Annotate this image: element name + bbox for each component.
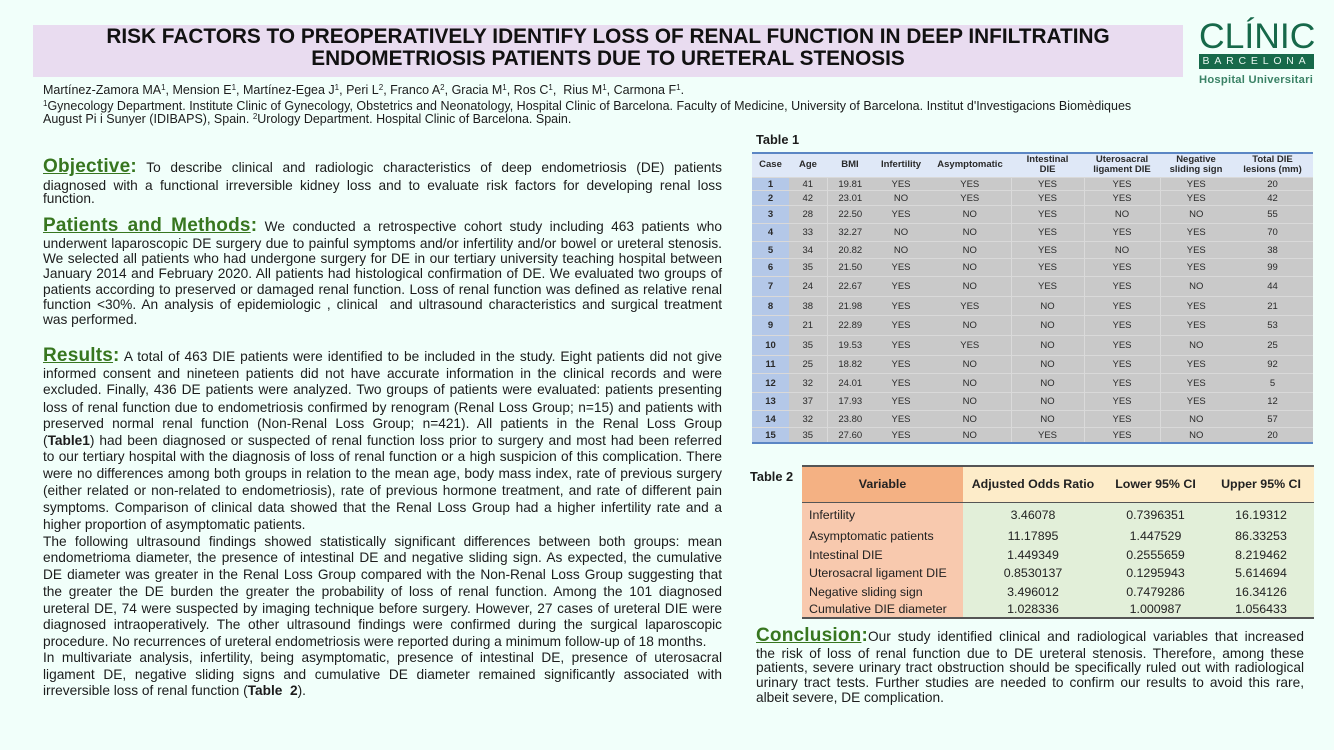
table 1: case data: 15	[765, 430, 776, 441]
table 1: case data: Negative	[1176, 154, 1216, 165]
table 1: case data: NO	[894, 245, 908, 256]
authors: Martínez-Zamora MA1, Mension E1, Martínez-Egea J1, Peri L2, Franco A2, Gracia M1, Ros C1, Rius M1, Carmona F1.	[43, 83, 684, 97]
table 1: case data: NO	[1189, 281, 1203, 292]
table 1: case data: NO	[963, 209, 977, 220]
panel: patients and methods: function <30%. An analysis of epidemiologic , clinical and ultrasound characteristics and surgical treatment	[43, 297, 722, 312]
table 2: multivariate odds ratios: 0.1295943	[1126, 566, 1185, 580]
table 1: case data: YES	[891, 301, 910, 312]
table 1: case data: NO	[1189, 430, 1203, 441]
table 1: case data: YES	[891, 209, 910, 220]
table 1: case data: YES	[1112, 320, 1132, 331]
logo: Clinic Barcelona	[1199, 16, 1315, 86]
table 1: case data: Uterosacral	[1096, 154, 1148, 165]
table 2: multivariate odds ratios: 0.7479286	[1126, 584, 1185, 598]
table 1: case data: 53	[1267, 320, 1278, 331]
title banner: ENDOMETRIOSIS PATIENTS DUE TO URETERAL STENOSIS	[311, 47, 905, 70]
table 2: multivariate odds ratios: Adjusted Odds Ratio	[972, 477, 1094, 491]
table 1: case data: 9	[768, 320, 773, 331]
table 1: case data: YES	[891, 262, 910, 273]
table 1: case data: YES	[891, 396, 910, 407]
table 1: case data: YES	[891, 340, 910, 351]
table 1: case data: 5	[768, 245, 773, 256]
table 2: multivariate odds ratios: 1.000987	[1130, 602, 1181, 616]
panel: patients and methods: underwent laparoscopic DE surgery due to painful symptoms and/or infertility and/or bowel or ureteral stenosis.	[43, 236, 722, 251]
table 1: case data: 42	[1267, 193, 1278, 204]
title banner: RISK FACTORS TO PREOPERATIVELY IDENTIFY LOSS OF RENAL FUNCTION IN DEEP INFILTRATING	[106, 25, 1110, 48]
table 2: multivariate odds ratios: 0.2555659	[1126, 548, 1185, 562]
table 1: case data: 20	[1267, 430, 1278, 441]
table 2: multivariate odds ratios: 1.449349	[1007, 548, 1059, 562]
table 1: case data: Case	[759, 159, 782, 170]
table 1: case data: 22.89	[838, 320, 862, 331]
panel: conclusion: the risk of loss of renal function due to DE ureteral stenosis. Therefore, among these	[756, 646, 1304, 661]
table 2: multivariate odds ratios: Cumulative DIE diameter	[809, 602, 947, 616]
table 1: case data: NO	[1115, 245, 1129, 256]
table 1: case data: 32	[802, 414, 813, 425]
table 1: case data: 35	[802, 430, 813, 441]
table 1: case data: YES	[1187, 378, 1206, 389]
table 1: case data: NO	[963, 320, 977, 331]
panel: results: the greater the DE burden the greater the probability of loss of renal function. Among the 101 diagnosed	[43, 584, 722, 599]
table 2: multivariate odds ratios: 86.33253	[1235, 529, 1287, 543]
panel: results: Results: A total of 463 DIE patients were identified to be included in the study. Eight patients did not give	[43, 345, 722, 366]
table 1: case data: 21.98	[838, 301, 862, 312]
table 1: case data: 10	[765, 340, 776, 351]
table 2: multivariate odds ratios: 8.219462	[1235, 548, 1287, 562]
panel: results: (either related or non-related to endometriosis), rate of previous hormone treatment, and rate of different pain	[43, 483, 722, 498]
table 1: case data: NO	[1040, 396, 1055, 407]
table 1: case data: 99	[1267, 262, 1278, 273]
table 1: case data: NO	[963, 378, 977, 389]
table 2: multivariate odds ratios: Infertility	[809, 508, 855, 522]
panel: results: symptoms. Comparison of clinical data showed that the Renal Loss Group had a higher infertility rate and a	[43, 500, 722, 515]
panel: results: The following ultrasound findings showed statistically significant differences between both groups: mean	[43, 534, 722, 549]
table 1: case data: 11	[765, 359, 776, 370]
table 1: case data: 13	[765, 396, 776, 407]
table 2: multivariate odds ratios: 0.7396351	[1126, 508, 1185, 522]
table 1: case data: Intestinal	[1027, 154, 1068, 165]
table 1: case data: YES	[891, 359, 910, 370]
table 1: case data: YES	[1112, 262, 1132, 273]
table 1: case data: 25	[802, 359, 813, 370]
table 1: case data: YES	[960, 340, 979, 351]
table 1: case data: YES	[1112, 414, 1132, 425]
table 1: case data: 7	[768, 281, 773, 292]
panel: results: preserved normal renal function (Non-Renal Loss Group; n=421). All patients in the Renal Loss Group	[43, 416, 722, 431]
table 1: case data: 55	[1267, 209, 1278, 220]
table 1: case data: 28	[802, 209, 813, 220]
panel: patients and methods: was performed.	[43, 312, 137, 327]
table 1: case data: NO	[1189, 340, 1203, 351]
table 1: case data: 57	[1267, 414, 1278, 425]
table 1: case data: YES	[960, 301, 979, 312]
table 2: multivariate odds ratios: Intestinal DIE	[809, 548, 883, 562]
panel: objective	[43, 156, 722, 206]
table 2: multivariate odds ratios: 1.447529	[1130, 529, 1181, 543]
panel: results: irreversible loss of renal function (Table 2).	[43, 683, 306, 698]
table 1: case data: 42	[802, 193, 813, 204]
table 2: multivariate odds ratios: Lower 95% CI	[1115, 477, 1196, 491]
table 1: case data: YES	[1187, 396, 1206, 407]
table 1: case data: YES	[1112, 227, 1132, 238]
table 2: multivariate odds ratios: Asymptomatic patients	[809, 529, 934, 543]
table 1: case data: sliding sign	[1170, 164, 1222, 175]
table 1: case data: YES	[1187, 359, 1206, 370]
table 1: case data: 19.53	[838, 340, 862, 351]
table 2: multivariate odds ratios: 1.028336	[1007, 602, 1059, 616]
panel: patients and methods: Patients and Methods: We conducted a retrospective cohort study including 463 patients who	[43, 215, 722, 236]
panel: conclusion: patients, severe urinary tract obstruction should be specifically ruled out with radiological	[756, 660, 1304, 675]
table 1: case data: NO	[963, 227, 977, 238]
table 1: case data: 33	[802, 227, 813, 238]
table 1: case data: YES	[1112, 378, 1132, 389]
table 1: case data: 38	[802, 301, 813, 312]
table 1: case data: 92	[1267, 359, 1278, 370]
table 1: case data: YES	[1038, 193, 1057, 204]
table 1: case data: YES	[1187, 245, 1206, 256]
table 1: case data: YES	[1038, 430, 1057, 441]
table 1: case data: 24	[802, 281, 813, 292]
panel: patients and methods: January 2014 and February 2020. All patients had histological confirmation of DE. We evaluated two groups of	[43, 266, 722, 281]
table 1: case data: 8	[768, 301, 773, 312]
table 1: case data: 5	[1270, 378, 1275, 389]
table 1: case data: YES	[1187, 178, 1206, 190]
table 1: case data: NO	[1189, 209, 1203, 220]
table 1: case data: YES	[1038, 281, 1057, 292]
table 1: case data: NO	[1040, 378, 1055, 389]
table 1: case data: NO	[963, 359, 977, 370]
table 1: case data: 27.60	[838, 430, 862, 441]
table 1: case data: NO	[1040, 359, 1055, 370]
table 1: case data: YES	[891, 178, 910, 190]
table 2: multivariate odds ratios: 0.8530137	[1004, 566, 1062, 580]
table 1: case data: Total DIE	[1252, 154, 1293, 165]
table 1: case data: YES	[1038, 262, 1057, 273]
table 2: multivariate odds ratios: Variable	[859, 477, 906, 491]
table 1: case data: 22.67	[838, 281, 862, 292]
table 2: multivariate odds ratios: 5.614694	[1235, 566, 1287, 580]
table 1: case data: DIE	[1040, 164, 1055, 175]
table 1: case data: 14	[765, 414, 776, 425]
table 1: case data: YES	[1112, 396, 1132, 407]
table 1: case data: YES	[1112, 281, 1132, 292]
panel: results	[43, 345, 722, 698]
table 1: case data: YES	[960, 178, 979, 190]
table 1: case data: 17.93	[838, 396, 862, 407]
table 2: multivariate odds ratios: Uterosacral ligament DIE	[809, 566, 947, 580]
table 1: case data: YES	[1112, 193, 1132, 204]
table 1: case data: NO	[963, 245, 977, 256]
table 1: case data: 18.82	[838, 359, 862, 370]
table 1: case data: 21	[802, 320, 813, 331]
table 1: case data: 37	[802, 396, 813, 407]
table 1: case data: 38	[1267, 245, 1278, 256]
table 1: case data: YES	[1187, 227, 1206, 238]
table 1: case data: YES	[1112, 178, 1132, 190]
panel: conclusion	[756, 625, 1304, 705]
table 1: case data: 19.81	[838, 178, 862, 190]
affiliations	[43, 99, 1131, 126]
table 1: case data: 35	[802, 340, 813, 351]
logo: Clinic Barcelona: Hospital Universitari	[1199, 74, 1313, 86]
affiliations: 1Gynecology Department. Institute Clinic of Gynecology, Obstetrics and Neonatology, Hospital Clinic of Barcelona. Faculty of Medicine, University of Barcelona. Institut d'Investigacions Biomèdiques	[43, 99, 1131, 113]
heading: table 1: Table 1	[756, 132, 799, 147]
panel: conclusion: urinary tract tests. Further studies are needed to confirm our results to avoid this rare,	[756, 675, 1304, 690]
table 1: case data: Age	[799, 159, 817, 170]
table 1: case data: NO	[963, 281, 977, 292]
panel: results: endometrioma diameter, the presence of intestinal DE and negative sliding sign. As expected, the cumulative	[43, 550, 722, 565]
table 1: case data: 12	[765, 378, 776, 389]
table 1: case data: 20.82	[838, 245, 862, 256]
table 1: case data: 12	[1267, 396, 1278, 407]
table 2: multivariate odds ratios: Negative sliding sign	[809, 584, 923, 598]
table 1: case data: 1	[768, 178, 773, 190]
table 1: case data: NO	[1040, 301, 1055, 312]
table 1: case data: NO	[963, 262, 977, 273]
table 1: case data: YES	[1112, 359, 1132, 370]
panel: results: to our tertiary hospital with the diagnosis of loss of renal function or a high suspicion of this complication. There	[43, 449, 722, 464]
table 1: case data: NO	[963, 414, 977, 425]
panel: objective: diagnosed with a functional irreversible kidney loss and to evaluate risk factors for developing renal loss	[43, 178, 722, 193]
logo: Clinic Barcelona: BARCELONA	[1203, 55, 1310, 67]
table 1: case data: 20	[1267, 178, 1278, 190]
table 1: case data: 3	[768, 209, 773, 220]
table 2: multivariate odds ratios: Upper 95% CI	[1221, 477, 1301, 491]
table 1: case data: YES	[1038, 245, 1057, 256]
table 1: case data: YES	[891, 320, 910, 331]
panel: results: diagnosed intraoperatively. The other ultrasound findings were confirmed during the surgical laparoscopic	[43, 617, 722, 632]
table 1: case data: 32.27	[838, 227, 862, 238]
table 2: multivariate odds ratios: 16.34126	[1235, 584, 1287, 598]
table 1: case data: 23.80	[838, 414, 862, 425]
table 2: multivariate odds ratios: 16.19312	[1235, 508, 1287, 522]
table 2: multivariate odds ratios: 11.17895	[1008, 529, 1058, 543]
table 1: case data: 35	[802, 262, 813, 273]
panel: conclusion: albeit severe, DE complication.	[756, 690, 944, 705]
panel: results: informed consent and nineteen patients did not have accurate information in the clinical records and were	[43, 366, 722, 381]
table 1: case data: YES	[891, 378, 910, 389]
table 1: case data: NO	[1040, 320, 1055, 331]
panel: patients and methods: patients according to preserved or damaged renal function. Loss of renal function was defined as relative renal	[43, 282, 722, 297]
panel: results: higher proportion of asymptomatic patients.	[43, 517, 305, 532]
table 1: case data: 34	[802, 245, 813, 256]
table 1: case data: YES	[1112, 430, 1132, 441]
panel: results: procedure. No recurrences of ureteral endometriosis were reported during a minimum follow-up of 18 months.	[43, 634, 706, 649]
panel: conclusion: Conclusion:Our study identified clinical and radiological variables that increased	[756, 625, 1304, 646]
panel: patients and methods: We selected all patients who had undergone surgery for DE in our tertiary university teaching hospital between	[43, 251, 722, 266]
table 1: case data: NO	[894, 193, 908, 204]
panel: objective: Objective: To describe clinical and radiologic characteristics of deep endometriosis (DE) patients	[43, 156, 722, 177]
table 1: case data: YES	[1038, 227, 1057, 238]
table 1: case data: NO	[963, 396, 977, 407]
table 1: case data: YES	[891, 281, 910, 292]
table 1: case data: NO	[894, 227, 908, 238]
table 1: case data	[752, 152, 1313, 444]
table 1: case data: 22.50	[838, 209, 862, 220]
table 1: case data: NO	[963, 430, 977, 441]
table 2: multivariate odds ratios: 1.056433	[1235, 602, 1287, 616]
table 1: case data: 4	[768, 227, 773, 238]
table 1: case data: Asymptomatic	[937, 159, 1003, 170]
panel: results: (Table1) had been diagnosed or suspected of renal function loss prior to surgery and most had been referred	[43, 433, 722, 448]
heading: table 2: Table 2	[750, 469, 793, 484]
table 1: case data: 6	[768, 262, 773, 273]
panel: results: In multivariate analysis, infertility, being asymptomatic, presence of intestinal DE, presence of uterosacral	[43, 650, 722, 665]
table 1: case data: ligament DIE	[1093, 164, 1151, 175]
table 1: case data: lesions (mm)	[1243, 164, 1302, 175]
table 1: case data: Infertility	[881, 159, 921, 170]
logo: Clinic Barcelona: CLÍNIC	[1199, 16, 1315, 56]
table 1: case data: YES	[1187, 320, 1206, 331]
affiliations: August Pi i Sunyer (IDIBAPS), Spain. 2Urology Department. Hospital Clinic of Barcelona. Spain.	[43, 112, 571, 126]
table 1: case data: NO	[1115, 209, 1129, 220]
table 1: case data: 21	[1267, 301, 1278, 312]
table 1: case data: 70	[1267, 227, 1278, 238]
table 1: case data: 44	[1267, 281, 1278, 292]
table 1: case data: YES	[1112, 301, 1132, 312]
panel: results: ureteral DE, 74 were suspected by imaging technique before surgery. However, 27 cases of ureteral DIE were	[43, 601, 722, 616]
panel: patients and methods	[43, 215, 722, 327]
table 1: case data: YES	[1187, 262, 1206, 273]
table 1: case data: 2	[768, 193, 773, 204]
table 1: case data: NO	[1189, 414, 1203, 425]
table 1: case data: 41	[802, 178, 813, 190]
table 1: case data: YES	[891, 430, 910, 441]
table 1: case data: NO	[1040, 340, 1055, 351]
panel: results: ligament DE, negative sliding signs and cumulative DE diameter remained significantly associated with	[43, 667, 722, 682]
panel: objective: function.	[43, 191, 95, 206]
table 1: case data: YES	[1038, 178, 1057, 190]
table 1: case data: 32	[802, 378, 813, 389]
panel: results: were no differences among both groups in relation to the mean age, body mass index, rate of previous surgery	[43, 466, 722, 481]
table 1: case data: 23.01	[838, 193, 862, 204]
table 1: case data: YES	[960, 193, 979, 204]
table 2: multivariate odds ratios: 3.496012	[1007, 584, 1059, 598]
panel: results: excluded. Finally, 436 DE patients were analyzed. Two groups of patients were evaluated: patients presenting	[43, 382, 722, 397]
table 1: case data: 21.50	[838, 262, 862, 273]
table 1: case data: YES	[891, 414, 910, 425]
table 2: multivariate odds ratios	[802, 465, 1314, 619]
table 2: multivariate odds ratios: 3.46078	[1011, 508, 1055, 522]
panel: results: DE diameter was greater in the Renal Loss Group compared with the Non-Renal Loss Group suggesting that	[43, 567, 722, 582]
panel: results: loss of renal function due to endometriosis confirmed by renogram (Renal Loss Group; n=15) and patients with	[43, 400, 722, 415]
table 1: case data: BMI	[841, 159, 859, 170]
table 1: case data: 25	[1267, 340, 1278, 351]
title banner	[33, 25, 1183, 77]
table 1: case data: NO	[1040, 414, 1055, 425]
table 1: case data: YES	[1038, 209, 1057, 220]
table 1: case data: YES	[1187, 193, 1206, 204]
table 1: case data: YES	[1187, 301, 1206, 312]
table 1: case data: 24.01	[838, 378, 862, 389]
table 1: case data: YES	[1112, 340, 1132, 351]
